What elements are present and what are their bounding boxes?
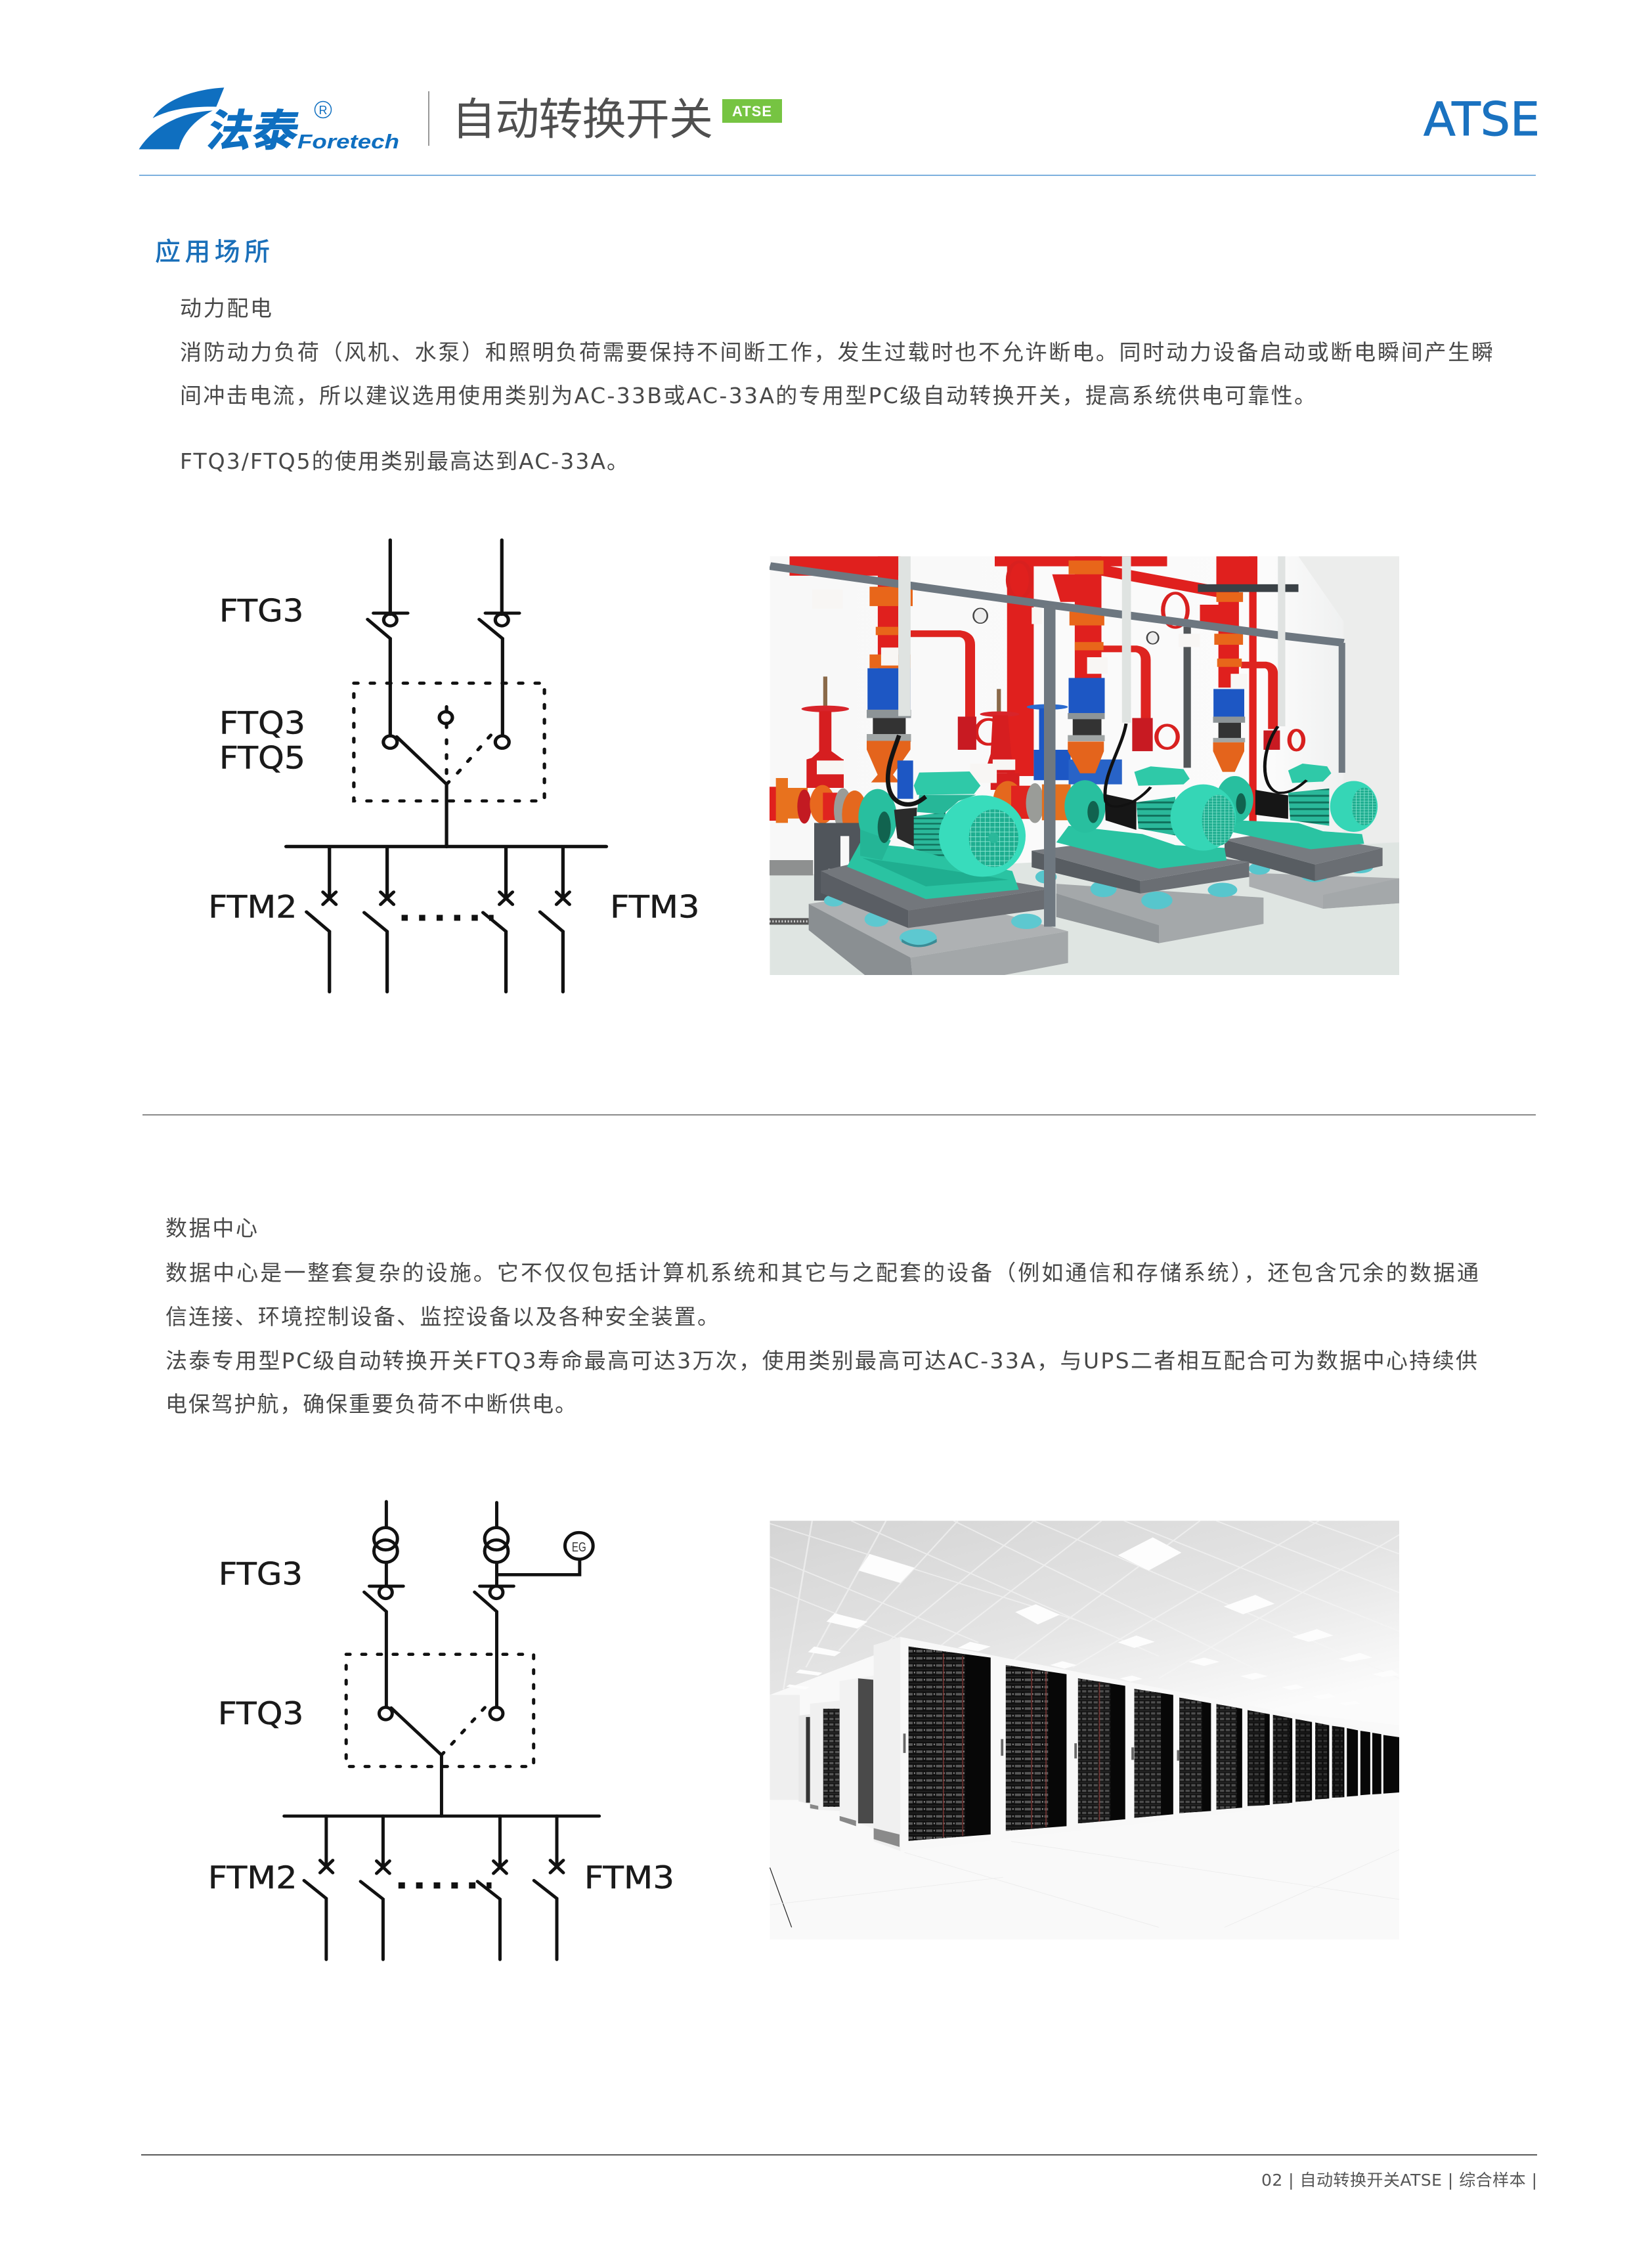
column pump 3 <box>1213 592 1245 772</box>
pump 2 flange taper <box>1068 741 1104 773</box>
circuit diagram: power distribution <box>208 540 700 992</box>
red piping <box>789 556 1257 823</box>
white labels <box>881 607 1244 783</box>
text block: data center: 数据中心是一整套复杂的设施。它不仅仅包括计算机系统和其它与之配套的设备（例如通信和存储系统），还包含冗余的数据通 <box>165 1260 1479 1286</box>
rail and posts <box>770 566 1343 643</box>
text block: power distribution: 消防动力负荷（风机、水泵）和照明负荷需要保持不间断工作，发生过载时也不允许断电。同时动力设备启动或断电瞬间产生瞬 <box>180 339 1493 365</box>
text block: data center: 信连接、环境控制设备、监控设备以及各种安全装置。 <box>165 1304 719 1330</box>
vertical flange taper <box>867 735 913 799</box>
photo: data center <box>770 1521 1399 1940</box>
cabinet row shell <box>874 1637 1399 1851</box>
pump feet 2 and 3 <box>1035 861 1373 909</box>
labels: FTM2 <box>208 1860 297 1896</box>
header: ATSE badge: ATSE <box>732 103 772 119</box>
pump 2 <box>1056 766 1236 869</box>
gray base <box>821 858 1051 928</box>
text block: power distribution: FTQ3/FTQ5的使用类别最高达到AC-33A。 <box>180 448 628 474</box>
labels: FTM3 <box>610 889 700 925</box>
terminal box <box>914 771 980 814</box>
emergency generator <box>498 1532 593 1574</box>
header: logo <box>139 87 399 159</box>
cabinet glass <box>909 1647 1399 1841</box>
text block: power distribution: 动力配电 <box>180 295 272 321</box>
text block: data center: 电保驾护航，确保重要负荷不中断供电。 <box>165 1391 576 1417</box>
labels: FTG3 <box>219 1557 303 1592</box>
pump 3 <box>1216 764 1378 850</box>
gray bases 2 and 3 <box>1032 831 1383 894</box>
rear cabinets <box>798 1676 874 1829</box>
support stand <box>814 823 860 901</box>
text block: data center <box>165 1215 1479 1417</box>
pipe and valve <box>770 735 867 838</box>
black cables <box>1105 724 1307 806</box>
column pump 1 <box>867 587 913 742</box>
gate valves <box>802 676 1122 787</box>
fan cover <box>939 795 1026 877</box>
text block: data center: 法泰专用型PC级自动转换开关FTQ3寿命最高可达3万次，使用类别最高可达AC-33A，与UPS二者相互配合可为数据中心持续供 <box>165 1348 1477 1374</box>
text block: power distribution: 间冲击电流，所以建议选用使用类别为AC-33B或AC-33A的专用型PC级自动转换开关，提高系统供电可靠性。 <box>180 383 1316 408</box>
emergency generator: EG <box>572 1539 586 1555</box>
photo: fire pumps <box>770 556 1399 978</box>
plinths 2 and 3 <box>1056 873 1399 943</box>
logo swoosh <box>139 87 224 149</box>
coupling <box>894 808 917 847</box>
volute <box>858 789 897 860</box>
ceiling lights <box>787 1538 1399 1705</box>
teal base <box>847 842 1019 899</box>
labels <box>208 1557 674 1896</box>
footer text: 02 | 自动转换开关ATSE | 综合样本 | <box>1261 2171 1537 2190</box>
labels: FTQ5 <box>219 740 305 776</box>
heading: application sites: 应用场所 <box>155 238 270 267</box>
ceiling grid <box>770 1521 1399 1689</box>
labels: FTM2 <box>208 889 297 925</box>
pump 1 foreground <box>770 735 1068 978</box>
header: ATSE label: ATSE <box>1424 93 1540 146</box>
feet <box>824 895 1042 947</box>
second horizontal pipe <box>991 773 1071 823</box>
gauges <box>973 608 1158 644</box>
text block: data center: 数据中心 <box>165 1215 257 1241</box>
logo chinese name: 法泰 <box>202 97 306 159</box>
labels: FTG3 <box>219 593 304 629</box>
white conduits <box>898 556 1286 726</box>
floor <box>770 842 1399 975</box>
header: ATSE badge <box>722 99 782 123</box>
registered mark: R <box>319 104 327 117</box>
motor fins <box>914 812 946 858</box>
cable <box>888 735 926 804</box>
circuit diagram: data center <box>208 1502 674 1959</box>
labels: FTQ3 <box>218 1696 304 1732</box>
logo english name: Foretech <box>297 130 399 153</box>
floor grate <box>770 918 809 924</box>
labels <box>208 593 700 925</box>
labels: FTM3 <box>584 1860 674 1896</box>
plinth <box>809 888 1068 978</box>
header: page title: 自动转换开关 <box>452 84 713 148</box>
dark rear post <box>1183 627 1191 768</box>
labels: FTQ3 <box>219 705 305 741</box>
column pump 2 <box>1068 561 1104 741</box>
server rack details <box>909 1647 1343 1841</box>
floor lines <box>770 1868 792 1927</box>
text block: power distribution <box>180 295 1493 474</box>
